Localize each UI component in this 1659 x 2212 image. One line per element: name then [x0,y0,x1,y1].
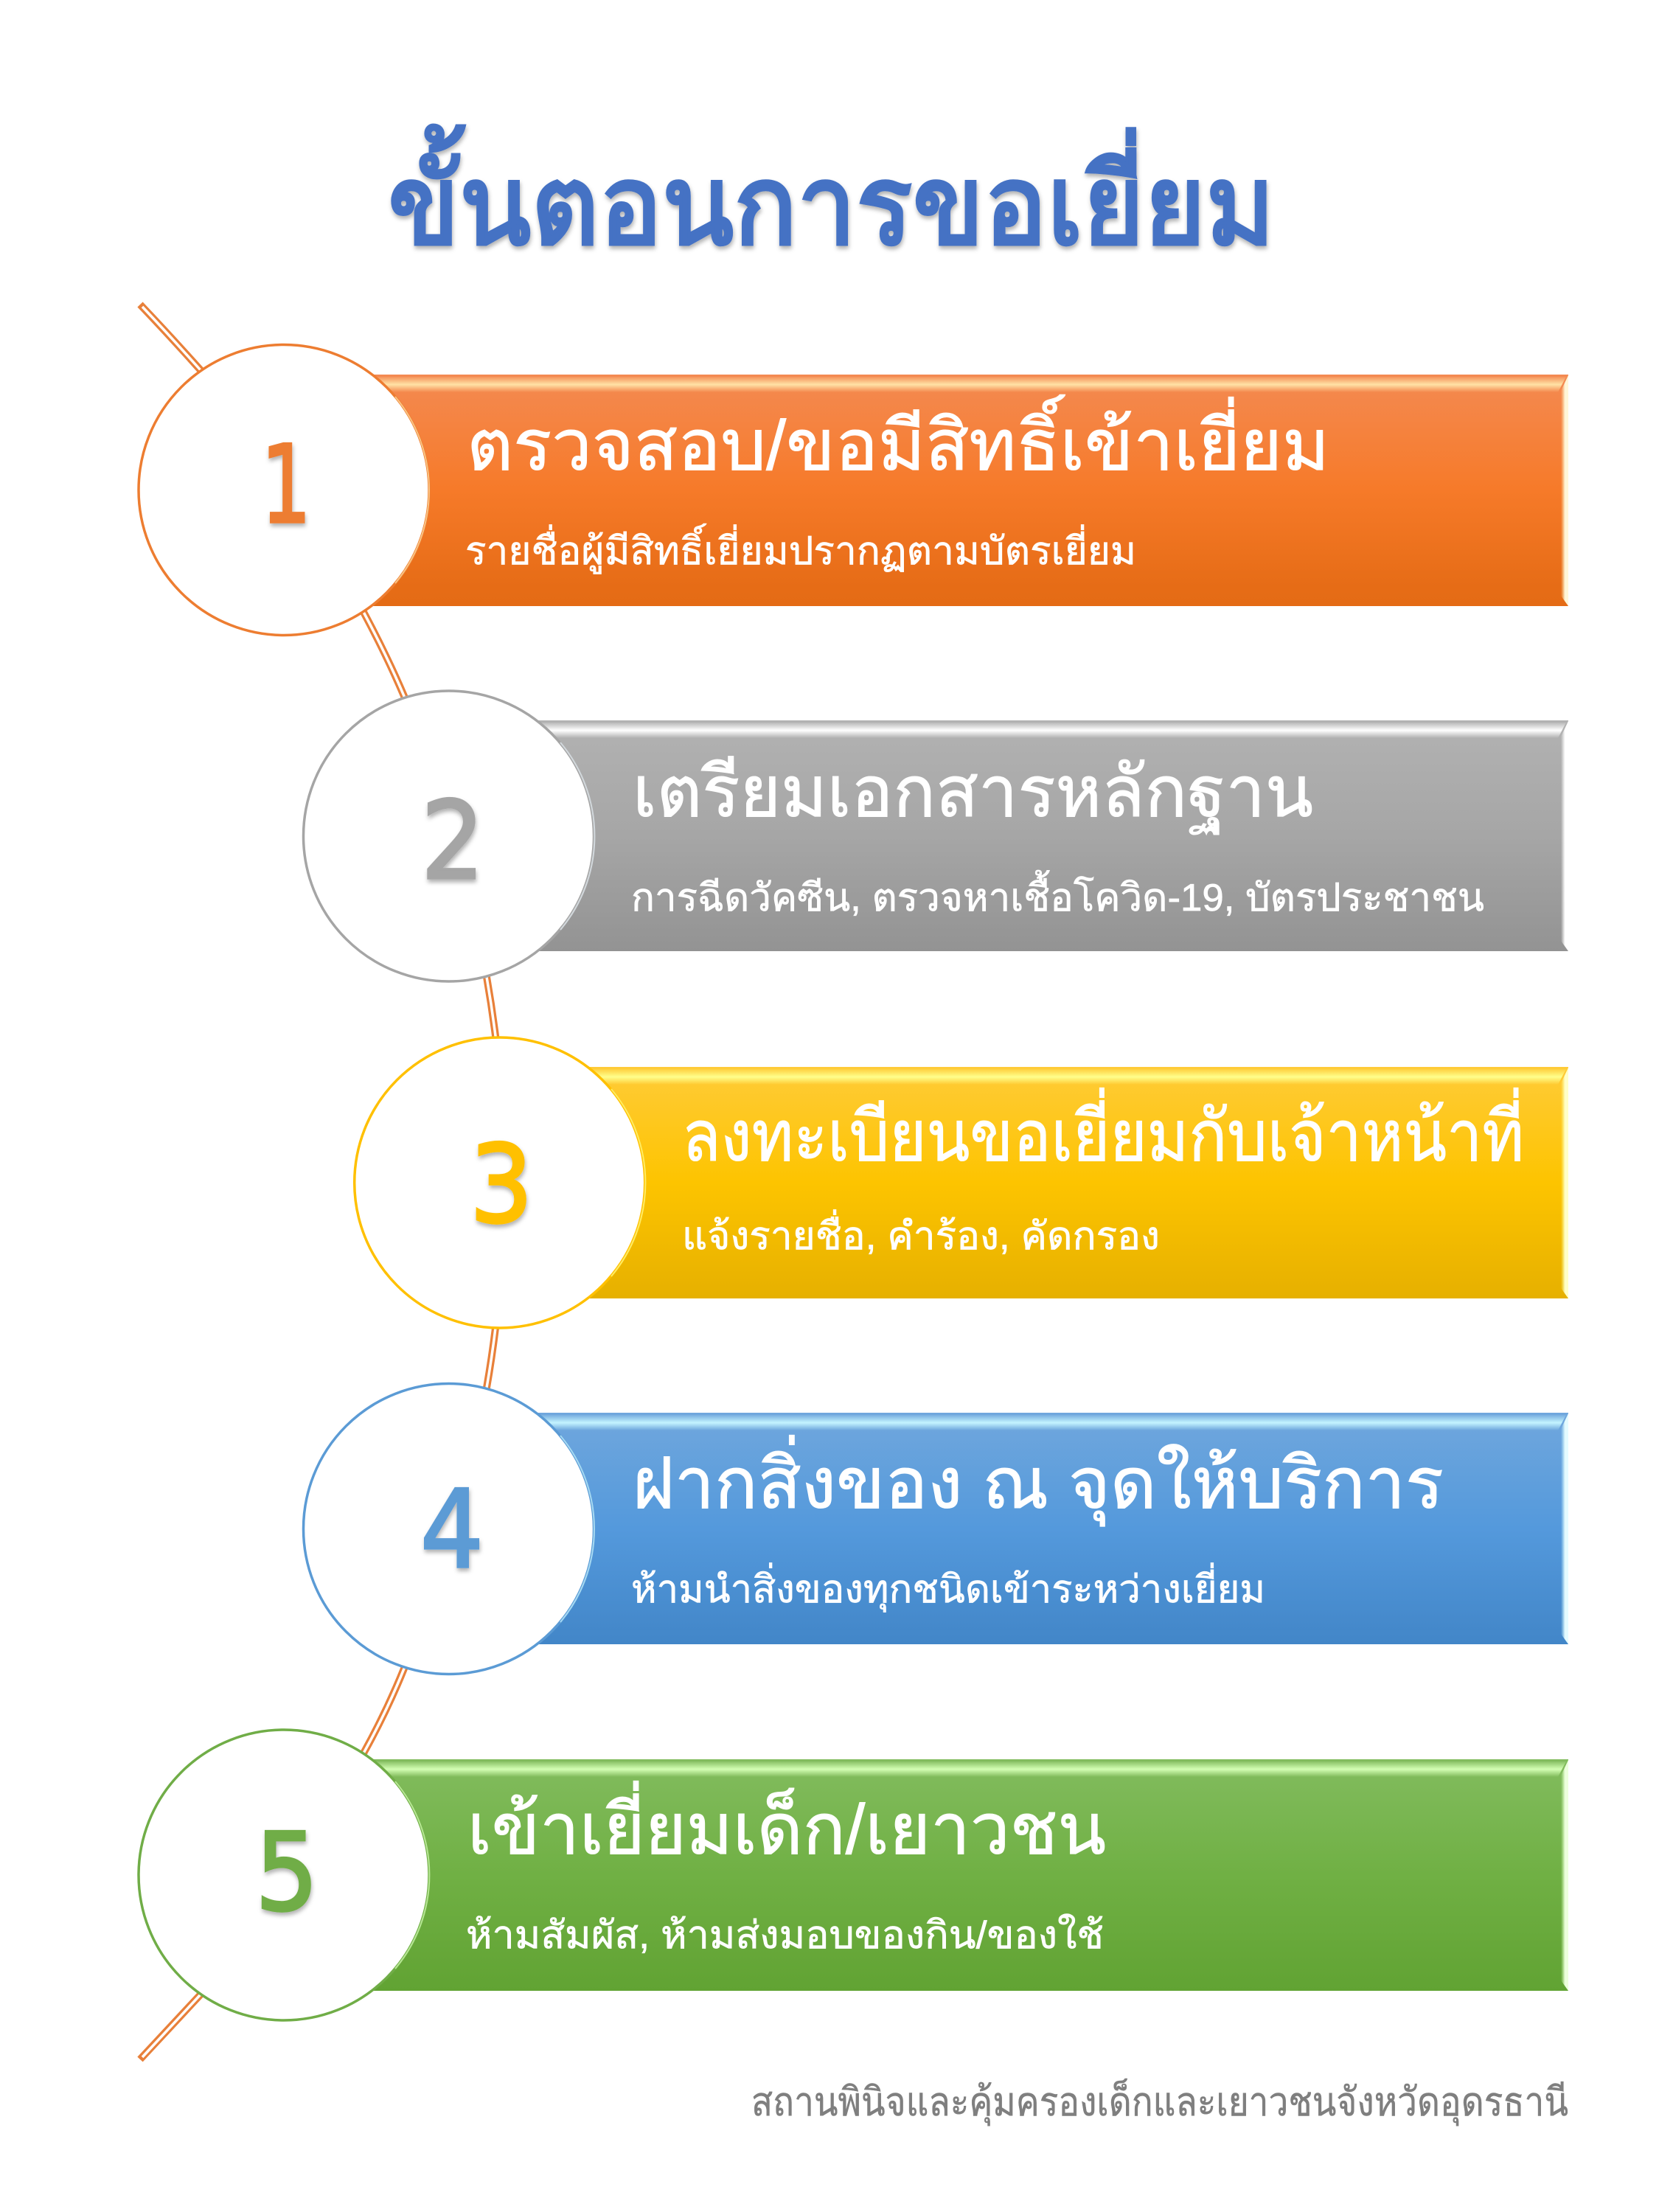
heading 1: ตรวจสอบ/ขอมีสิทธิ์เข้าเยี่ยม [467,394,1329,485]
bar 4 [448,1413,1568,1644]
description 1: รายชื่อผู้มีสิทธิ์เยี่ยมปรากฏตามบัตรเยี่ยม [465,524,1136,574]
description 2: การฉีดวัคซีน, ตรวจหาเชื้อโควิด-19, บัตรประชาชน [631,870,1484,919]
connector line [140,305,495,2059]
circle 5 [139,1730,429,2020]
footer organisation name: สถานพินิจและคุ้มครองเด็กและเยาวชนจังหวัดอุดรธานี [751,2079,1568,2126]
step 4 [304,1383,1568,1674]
heading 2: เตรียมเอกสารหลักฐาน [633,753,1313,835]
circle 3 [355,1037,645,1328]
circle 1 [139,345,429,636]
circle 4 [304,1383,594,1674]
bar 2 [448,720,1568,951]
description 4: ห้ามนำสิ่งของทุกชนิดเข้าระหว่างเยี่ยม [631,1562,1265,1613]
bar 1 [284,375,1568,606]
heading 3: ลงทะเบียนขอเยี่ยมกับเจ้าหน้าที่ [682,1088,1524,1176]
number 4: 4 [420,1467,484,1593]
step 5 [139,1730,1568,2020]
heading 5: เข้าเยี่ยมเด็ก/เยาวชน [467,1781,1106,1869]
bar 5 [284,1759,1568,1991]
step 3 [355,1037,1568,1328]
bar 3 [500,1067,1568,1298]
step 2 [304,691,1568,981]
number 1: 1 [261,422,311,548]
title: ขั้นตอนการขอเยี่ยม [388,125,1275,268]
number 5: 5 [255,1810,319,1935]
heading 4: ฝากสิ่งของ ณ จุดให้บริการ [633,1435,1444,1527]
number 2: 2 [421,779,484,904]
number 3: 3 [470,1122,533,1248]
description 5: ห้ามสัมผัส, ห้ามส่งมอบของกิน/ของใช้ [466,1913,1104,1957]
circle 2 [304,691,594,981]
step 1 [139,345,1568,636]
description 3: แจ้งรายชื่อ, คำร้อง, คัดกรอง [682,1209,1160,1258]
